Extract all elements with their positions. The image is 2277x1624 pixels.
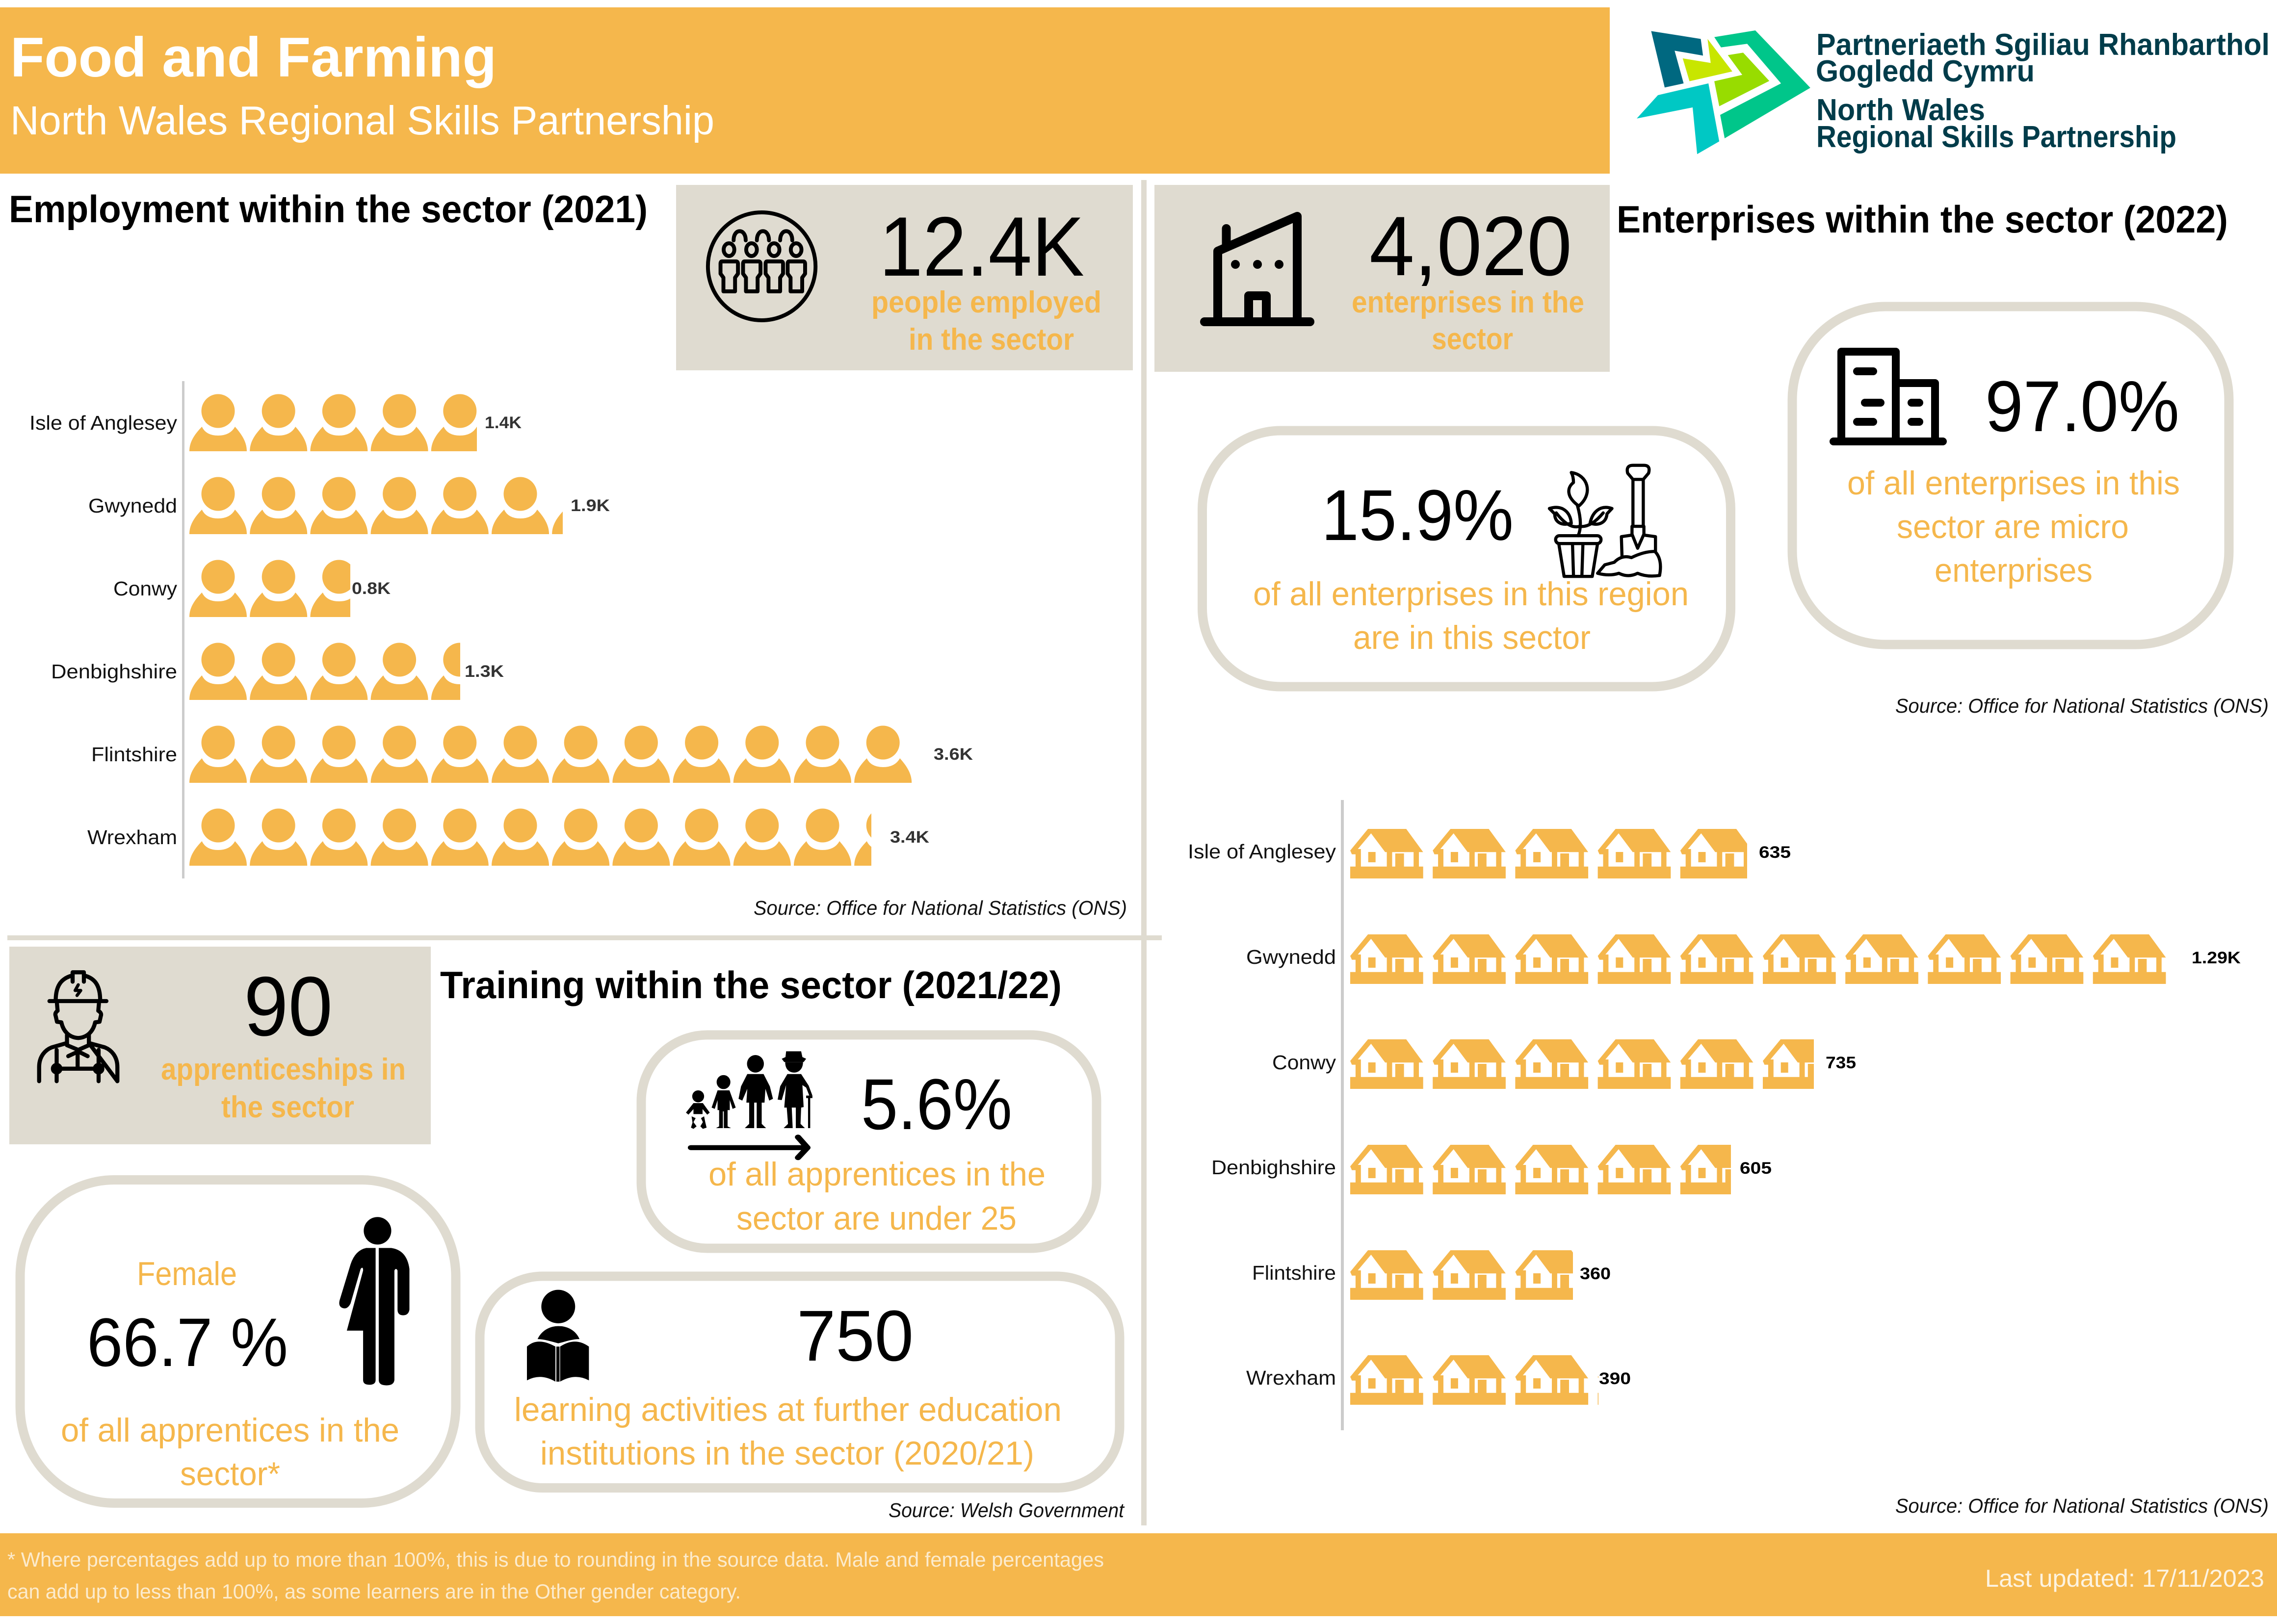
- row: Isle of Anglesey: Isle of Anglesey: [29, 412, 178, 434]
- row: Denbighshire: Denbighshire: [1211, 1156, 1336, 1179]
- title: Food and Farming: [10, 26, 497, 89]
- source: enterprises: Source: Office for National Statistics (ONS): [1895, 695, 2269, 717]
- logo mark: [1637, 30, 1810, 154]
- stat: 97.0%: 97.0%: [1985, 366, 2179, 447]
- footnote: can add up to less than 100%, as some learners are in the Other gender category.: [7, 1580, 741, 1603]
- icon: factory: [1204, 216, 1310, 322]
- stat caption: of all apprentices in the: [61, 1412, 399, 1449]
- stat caption: sector: [1432, 322, 1513, 356]
- row: Gwynedd: 1.29K: [2192, 949, 2241, 967]
- stat caption: [61, 1412, 399, 1493]
- chart: employment by area: [29, 381, 973, 878]
- row: Wrexham: [1246, 1355, 1671, 1405]
- stat caption: of all apprentices in the: [708, 1156, 1046, 1193]
- stat caption: [871, 285, 1101, 357]
- row: Conwy: [1272, 1039, 1856, 1089]
- row: Denbighshire: [51, 643, 504, 700]
- stat: 66.7 %: 66.7 %: [87, 1304, 288, 1381]
- card: learning activities: [480, 1276, 1120, 1488]
- row: Denbighshire: 605: [1740, 1159, 1772, 1178]
- row: Flintshire: 3.6K: [934, 745, 973, 764]
- panel: apprenticeships: [9, 947, 431, 1144]
- heading: enterprises: Enterprises within the sector (2022): [1617, 198, 2228, 241]
- row: Flintshire: Flintshire: [1252, 1262, 1336, 1284]
- row: Flintshire: 360: [1580, 1264, 1611, 1283]
- row: Isle of Anglesey: [1188, 829, 1791, 878]
- source: employment: Source: Office for National Statistics (ONS): [754, 897, 1127, 919]
- logo text: North Wales: [1816, 93, 1985, 127]
- stat caption: [708, 1156, 1046, 1237]
- row: Gwynedd: Gwynedd: [1246, 946, 1336, 968]
- icon: plant and shovel: [1549, 465, 1660, 576]
- stat caption: [1847, 464, 2180, 589]
- logo text: Gogledd Cymru: [1816, 54, 2035, 88]
- row: Isle of Anglesey: 635: [1759, 843, 1791, 862]
- source: training: Source: Welsh Government: [889, 1499, 1125, 1521]
- row: Gwynedd: [88, 477, 610, 534]
- row: Isle of Anglesey: [29, 394, 522, 451]
- logo text: Partneriaeth Sgiliau Rhanbarthol: [1816, 28, 2270, 62]
- row: Conwy: 0.8K: [352, 579, 391, 598]
- stat: 5.6%: 5.6%: [861, 1064, 1012, 1145]
- header banner: [0, 7, 1610, 174]
- stat caption: apprenticeships in: [161, 1053, 406, 1086]
- stat caption: sector are micro: [1897, 508, 2129, 545]
- row: Conwy: 735: [1826, 1054, 1856, 1072]
- stat caption: enterprises in the: [1352, 285, 1584, 319]
- stat: 4,020: 4,020: [1369, 199, 1572, 293]
- stat caption: enterprises: [1935, 552, 2093, 589]
- stat caption: people employed: [871, 285, 1101, 319]
- row: Denbighshire: Denbighshire: [51, 660, 177, 683]
- row: Gwynedd: [1246, 934, 2241, 984]
- stat caption: learning activities at further education: [514, 1391, 1062, 1428]
- row: Conwy: Conwy: [1272, 1051, 1336, 1074]
- row: Gwynedd: 1.9K: [571, 496, 610, 515]
- row: Wrexham: [87, 808, 929, 866]
- icon: group of people: [708, 212, 815, 320]
- card: 15.9% of region: [1202, 431, 1731, 687]
- logo text: [1816, 28, 2270, 154]
- footnote: [7, 1548, 1104, 1603]
- stat: 15.9%: 15.9%: [1321, 475, 1514, 556]
- row: Flintshire: [91, 726, 973, 783]
- icon: office buildings: [1833, 352, 1943, 441]
- stat caption: sector are under 25: [736, 1200, 1017, 1237]
- row: Gwynedd: Gwynedd: [88, 494, 177, 517]
- icon: people by age with arrow: [686, 1051, 812, 1158]
- row: Wrexham: Wrexham: [1246, 1366, 1336, 1389]
- card: 97.0% micro enterprises: [1792, 307, 2229, 644]
- logo: [1637, 28, 2270, 154]
- stat caption: the sector: [221, 1090, 354, 1124]
- row: Flintshire: Flintshire: [91, 743, 177, 766]
- stat: 90: 90: [244, 959, 333, 1054]
- row: Wrexham: 3.4K: [890, 828, 929, 847]
- row: Denbighshire: 1.3K: [465, 662, 504, 681]
- stat caption: are in this sector: [1353, 619, 1591, 656]
- panel: enterprises: [1154, 185, 1610, 372]
- stat: 12.4K: 12.4K: [879, 200, 1084, 294]
- chart: enterprises by area: [1188, 800, 2241, 1430]
- row: Flintshire: [1252, 1250, 1611, 1300]
- row: Isle of Anglesey: 1.4K: [485, 413, 522, 432]
- footer: [0, 1533, 2277, 1616]
- footnote: * Where percentages add up to more than 100%, this is due to rounding in the source data. Male and female percentages: [7, 1548, 1104, 1571]
- icon: gender figure: [339, 1217, 410, 1385]
- logo text: Regional Skills Partnership: [1816, 120, 2176, 154]
- card: 5.6% under 25: [641, 1035, 1097, 1248]
- stat caption: [1352, 285, 1584, 356]
- stat caption: institutions in the sector (2020/21): [540, 1435, 1034, 1472]
- row: Denbighshire: [1211, 1145, 1772, 1194]
- panel: people employed: [676, 185, 1133, 370]
- last updated: Last updated: 17/11/2023: [1985, 1565, 2264, 1592]
- icon: worker: [39, 972, 117, 1081]
- stat caption: of all enterprises in this: [1847, 464, 2180, 502]
- row: Conwy: Conwy: [113, 577, 178, 600]
- row: Conwy: [113, 560, 391, 617]
- row: Wrexham: 390: [1599, 1369, 1631, 1388]
- icon: reader with book: [527, 1290, 589, 1382]
- stat caption: sector*: [180, 1455, 280, 1493]
- heading: training: Training within the sector (2021/22): [440, 963, 1062, 1006]
- source: enterprises chart: Source: Office for National Statistics (ONS): [1895, 1495, 2269, 1517]
- stat caption: [1253, 575, 1689, 656]
- stat caption: [514, 1391, 1062, 1472]
- heading: employment: Employment within the sector (2021): [9, 187, 648, 231]
- row: Isle of Anglesey: Isle of Anglesey: [1188, 840, 1336, 863]
- row: Wrexham: Wrexham: [87, 826, 177, 849]
- stat caption: [161, 1053, 406, 1124]
- stat caption: in the sector: [909, 323, 1074, 357]
- subtitle: North Wales Regional Skills Partnership: [10, 98, 714, 143]
- stat label: Female: Female: [137, 1255, 237, 1292]
- stat: 750: 750: [797, 1296, 914, 1376]
- card: female share: [20, 1180, 456, 1503]
- stat caption: of all enterprises in this region: [1253, 575, 1689, 613]
